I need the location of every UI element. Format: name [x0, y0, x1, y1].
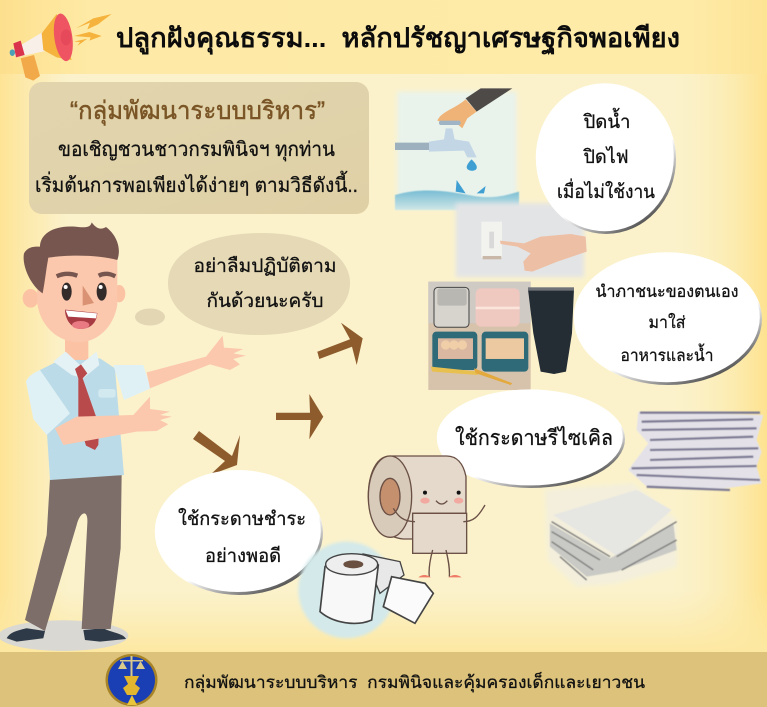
arrow: to top right: [317, 323, 363, 365]
speech bubble: water and lights: [536, 83, 676, 234]
panel: invitation: [29, 82, 369, 214]
illustration: white paper stack: [545, 483, 677, 587]
bubble line 2: มาใส่: [648, 313, 686, 332]
bubble text: ใช้กระดาษรีไซเคิล: [455, 426, 613, 450]
arrow: to right: [276, 394, 323, 439]
thought dot: [135, 308, 165, 326]
reminder line 1: อย่าลืมปฏิบัติตาม: [194, 256, 336, 277]
logo: department seal: [106, 654, 158, 706]
illustration: faucet: [395, 88, 519, 210]
speech bubble: reminder: [168, 233, 350, 335]
speech bubble: recycled paper: [437, 389, 625, 488]
header band: [0, 0, 767, 74]
illustration: man presenting: [0, 222, 246, 651]
icon: megaphone: [10, 12, 112, 81]
bubble line 2: อย่างพอดี: [205, 545, 281, 567]
illustration: lunch boxes and tumbler: [428, 282, 574, 390]
illustration: toilet paper character: [368, 456, 485, 577]
bubble line 3: อาหารและน้ำ: [620, 343, 714, 365]
invitation heading: “กลุ่มพัฒนาระบบบริหาร”: [70, 97, 325, 126]
invitation line 2: เริ่มต้นการพอเพียงได้ง่ายๆ ตามวิธีดังนี้..: [35, 171, 358, 197]
bubble line 1: ใช้กระดาษชำระ: [178, 508, 306, 530]
footer text: กลุ่มพัฒนาระบบบริหาร กรมพินิจและคุ้มครองเด็กและเยาวชน: [184, 671, 645, 693]
speech bubble: use toilet paper sparingly: [155, 470, 323, 595]
arrow: to bottom right: [193, 431, 240, 475]
speech bubble: bring own containers: [574, 252, 762, 385]
bubble line 1: ปิดน้ำ: [583, 108, 630, 133]
illustration: paper stack: [628, 412, 763, 490]
illustration: toilet paper roll: [298, 542, 433, 638]
footer band: [0, 652, 767, 707]
title: ปลูกฝังคุณธรรม... หลักปรัชญาเศรษฐกิจพอเพียง: [116, 23, 680, 56]
bubble line 2: ปิดไฟ: [583, 146, 628, 168]
illustration: light switch: [456, 203, 587, 277]
bubble line 3: เมื่อไม่ใช้งาน: [557, 178, 655, 203]
bubble line 1: นำภาชนะของตนเอง: [596, 283, 738, 301]
reminder line 2: กันด้วยนะครับ: [206, 291, 324, 312]
invitation line 1: ขอเชิญชวนชาวกรมพินิจฯ ทุกท่าน: [58, 139, 335, 162]
